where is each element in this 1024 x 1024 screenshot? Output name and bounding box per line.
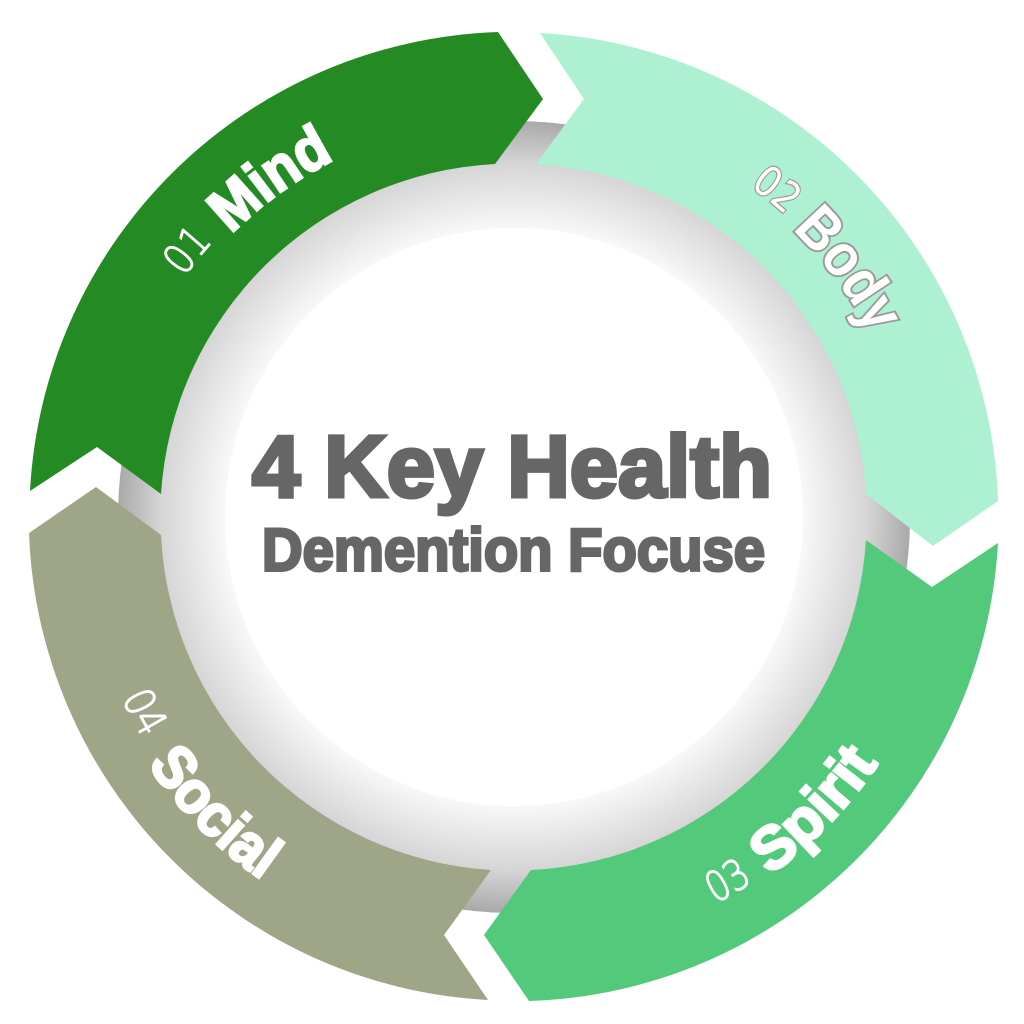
number 04: 04 <box>124 690 168 734</box>
label Mind: Mind <box>204 121 333 234</box>
panel: 01 Mind arrow segment <box>30 32 543 494</box>
subtitle: Demention Focuse <box>262 516 765 584</box>
number 02: 02 <box>754 166 801 214</box>
label Body: Body <box>792 200 901 328</box>
label Social: Social <box>152 746 286 880</box>
center white disc <box>225 228 803 806</box>
label Spirit: Spirit <box>750 744 880 870</box>
panel: 02 Body arrow segment <box>536 33 998 546</box>
title: 4 Key Health <box>252 418 772 516</box>
panel: 04 Social arrow segment <box>29 487 491 1000</box>
number 03: 03 <box>706 859 748 900</box>
number 01: 01 <box>164 228 211 272</box>
gray shaded ring <box>118 121 910 913</box>
panel: 03 Spirit arrow segment <box>484 540 998 1001</box>
